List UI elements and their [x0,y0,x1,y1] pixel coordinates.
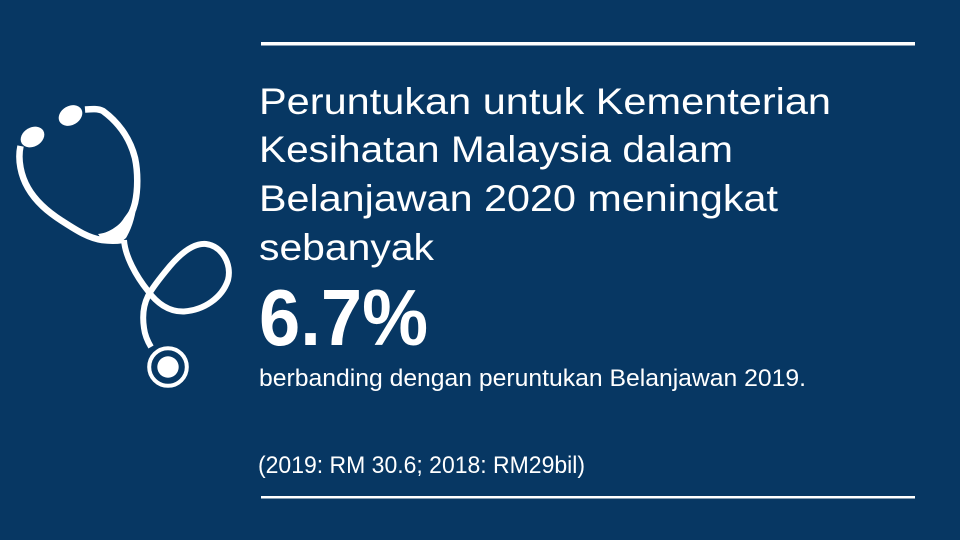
comparison text: berbanding dengan peruntukan Belanjawan 2019. [259,365,806,392]
heading text [259,81,831,268]
icon: stethoscope [17,101,229,386]
heading text: Peruntukan untuk Kementerian [259,81,831,122]
heading text: Kesihatan Malaysia dalam [259,129,733,170]
heading text: sebanyak [259,227,435,268]
heading text: Belanjawan 2020 meningkat [259,178,779,219]
footnote: (2019: RM 30.6; 2018: RM29bil) [258,452,585,479]
key figure: 6.7%: 6.7% [259,273,428,362]
